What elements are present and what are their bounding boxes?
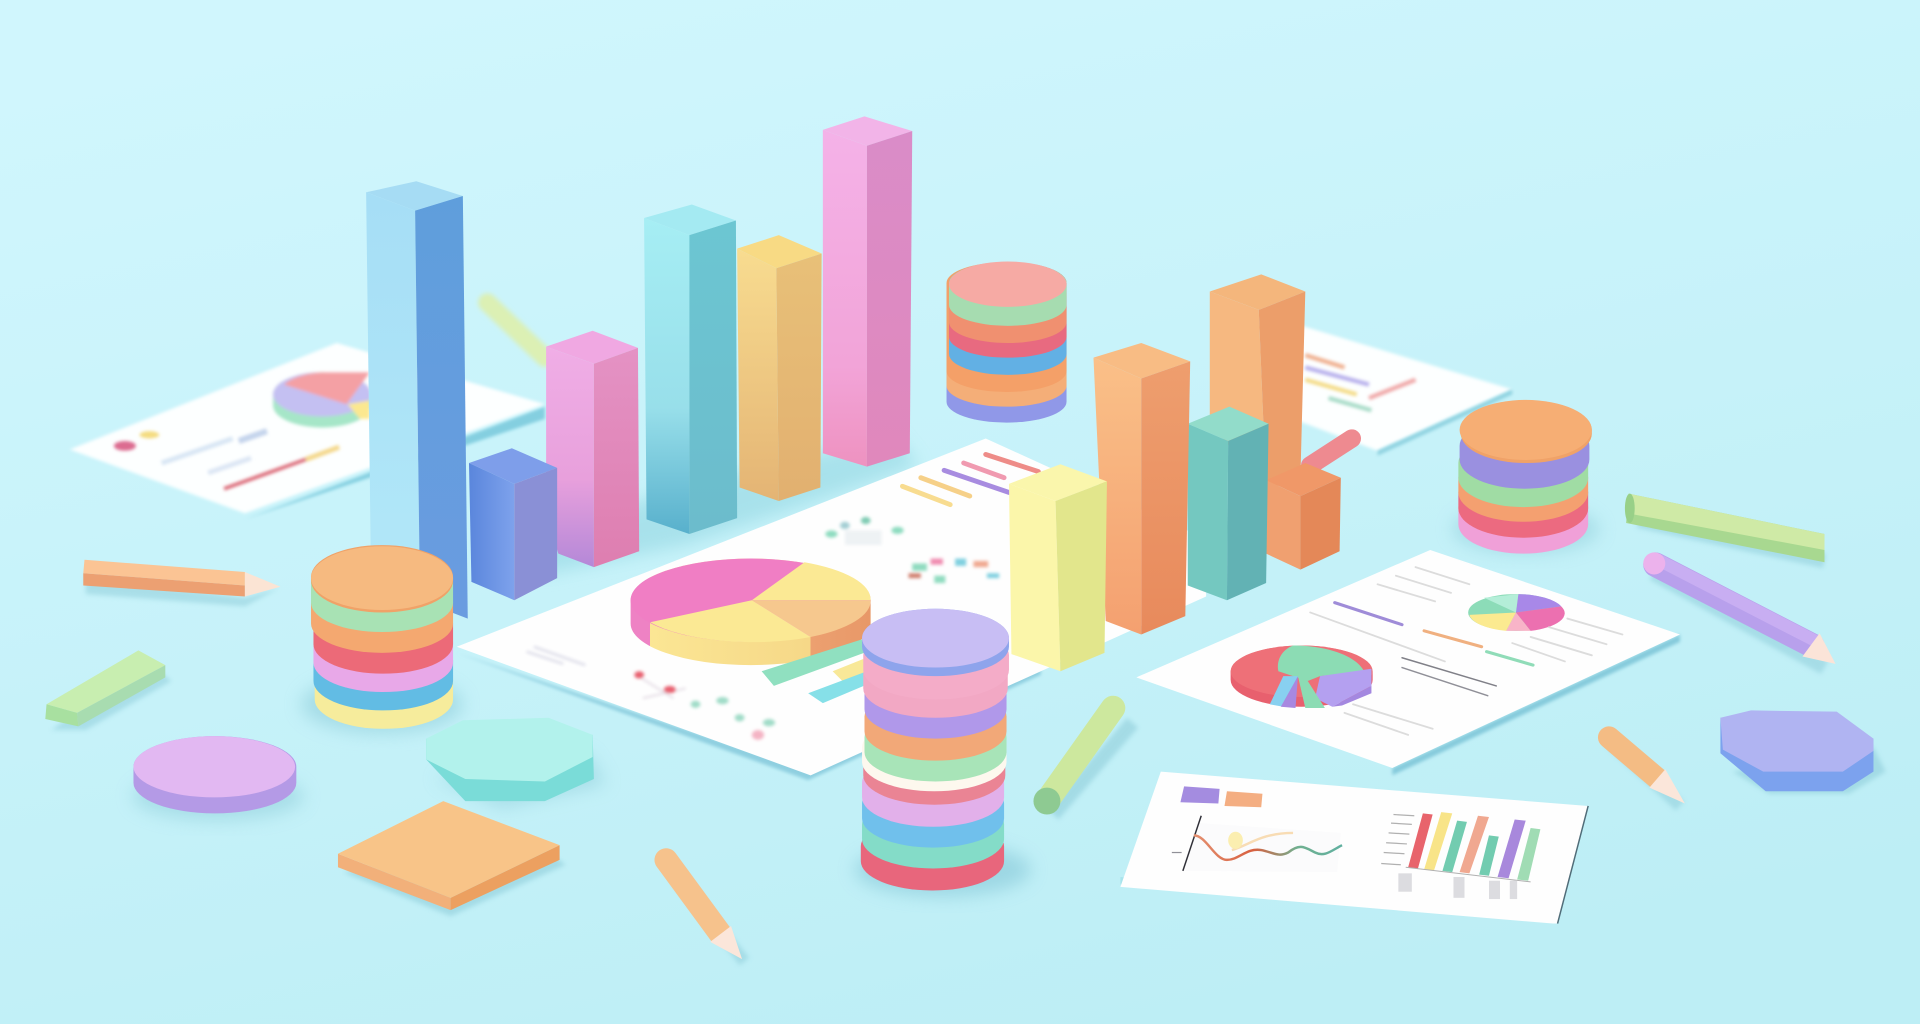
bar: short blue: [469, 448, 557, 600]
bar: pink: [546, 331, 639, 567]
faint text lines: [527, 647, 585, 665]
green, yellow and cyan bars: [762, 637, 874, 703]
big pie chart: [1231, 646, 1373, 708]
coin stack: front center: [855, 609, 1031, 897]
bar: teal: [1188, 407, 1269, 600]
legend swatches: [1180, 786, 1262, 807]
bar chart: [1381, 812, 1540, 899]
pencil: back green: [487, 303, 545, 358]
paper: central report: [457, 439, 1206, 780]
bar: pale yellow: [1009, 464, 1107, 671]
colored rows top right: [902, 454, 1038, 505]
report rules: [1310, 567, 1622, 735]
pencil: left orange: [83, 560, 280, 606]
legend dots and lines: [114, 431, 339, 489]
pencil: orange bottom: [666, 860, 744, 962]
mini chart cluster: [909, 559, 999, 583]
pencil: purple: [1643, 552, 1836, 668]
paper: right report: [1136, 550, 1680, 775]
pencil: red stub behind bars: [1310, 439, 1352, 465]
paper: back right report: [1273, 325, 1512, 456]
pencil: green center: [1033, 708, 1133, 815]
colored lines on paper: [1305, 355, 1416, 410]
bar: tall blue: [366, 181, 468, 619]
coin stack: top center: [947, 262, 1067, 423]
pie chart: central: [631, 559, 871, 665]
paper: front chart sheet: [1120, 772, 1588, 924]
bar: amber: [737, 235, 822, 501]
bar: small orange block: [1266, 463, 1341, 570]
small dots cluster: [825, 517, 904, 545]
block: teal hexagon: [426, 718, 606, 808]
floor shadow: behind bars: [539, 435, 918, 576]
pencil: green cylinder right: [1625, 494, 1824, 562]
pencil: orange right: [1609, 737, 1685, 806]
bar: tall pink: [823, 116, 912, 467]
coin stack: right: [1452, 400, 1599, 554]
small pie chart: [1468, 594, 1565, 631]
disc: lilac: [132, 736, 304, 821]
line chart: [1172, 816, 1342, 872]
bar: orange back: [1210, 274, 1305, 490]
tree marks lower left: [634, 671, 775, 740]
bar: cyan: [644, 205, 737, 534]
block: blue hexagon: [1720, 710, 1886, 794]
paper: back left report: [70, 343, 545, 519]
block: green slab: [45, 650, 171, 730]
bar: orange tall: [1093, 343, 1190, 634]
pie: back left: [273, 372, 371, 427]
block: orange square: [338, 801, 566, 916]
coin stack: left: [301, 545, 463, 734]
